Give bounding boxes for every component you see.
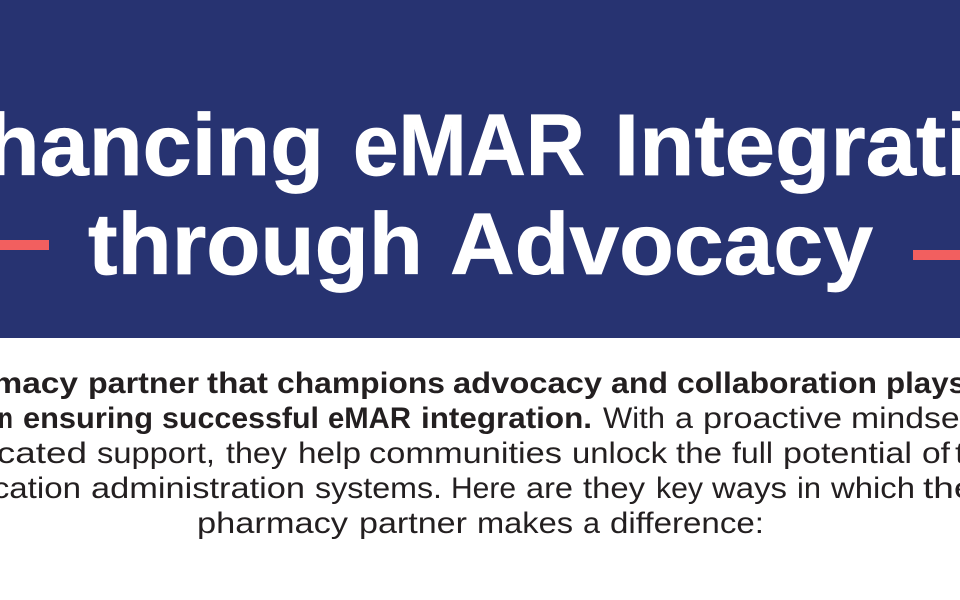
- intro paragraph: they: [226, 437, 287, 470]
- intro paragraph: advocacy: [453, 367, 602, 400]
- intro paragraph: and: [611, 367, 668, 400]
- intro paragraph: With: [603, 402, 665, 435]
- intro paragraph: help: [298, 437, 361, 470]
- intro paragraph: the: [676, 437, 722, 470]
- intro paragraph: makes: [477, 507, 573, 540]
- intro paragraph: mindset: [851, 402, 960, 435]
- intro paragraph: of: [922, 437, 951, 470]
- intro paragraph: key: [656, 472, 703, 505]
- intro paragraph: pharmacy: [197, 507, 348, 540]
- intro paragraph: unlock: [572, 437, 668, 470]
- title: Advocacy: [450, 196, 873, 293]
- intro paragraph: integration.: [421, 402, 592, 435]
- intro paragraph: support,: [97, 437, 215, 470]
- intro paragraph: successful: [162, 402, 319, 435]
- intro paragraph: a: [583, 507, 600, 540]
- intro paragraph: systems.: [315, 472, 442, 505]
- intro paragraph: which: [830, 472, 915, 505]
- intro paragraph: collaboration: [677, 367, 877, 400]
- right accent dash: [913, 250, 960, 260]
- intro paragraph: potential: [783, 437, 912, 470]
- intro paragraph: in: [797, 472, 821, 505]
- intro paragraph: they: [583, 472, 645, 505]
- intro paragraph: difference:: [610, 507, 764, 540]
- intro paragraph: ways: [711, 472, 787, 505]
- intro paragraph: Here: [451, 472, 516, 505]
- left accent dash: [0, 240, 49, 250]
- intro paragraph: a: [675, 402, 693, 435]
- title: [0, 97, 960, 293]
- intro paragraph: ensuring: [23, 402, 153, 435]
- intro paragraph: eMAR: [328, 402, 411, 435]
- title: through: [88, 196, 423, 293]
- intro paragraph: champions: [277, 367, 445, 400]
- intro paragraph: proactive: [703, 402, 842, 435]
- intro paragraph: are: [526, 472, 573, 505]
- intro paragraph: that: [207, 367, 268, 400]
- title: eMAR: [353, 97, 585, 194]
- header banner: [0, 0, 960, 338]
- intro paragraph: partner: [359, 507, 467, 540]
- intro paragraph: full: [732, 437, 773, 470]
- intro paragraph: communities: [369, 437, 562, 470]
- intro paragraph: [0, 367, 960, 540]
- intro paragraph: administration: [91, 472, 305, 505]
- intro paragraph: partner: [88, 367, 199, 400]
